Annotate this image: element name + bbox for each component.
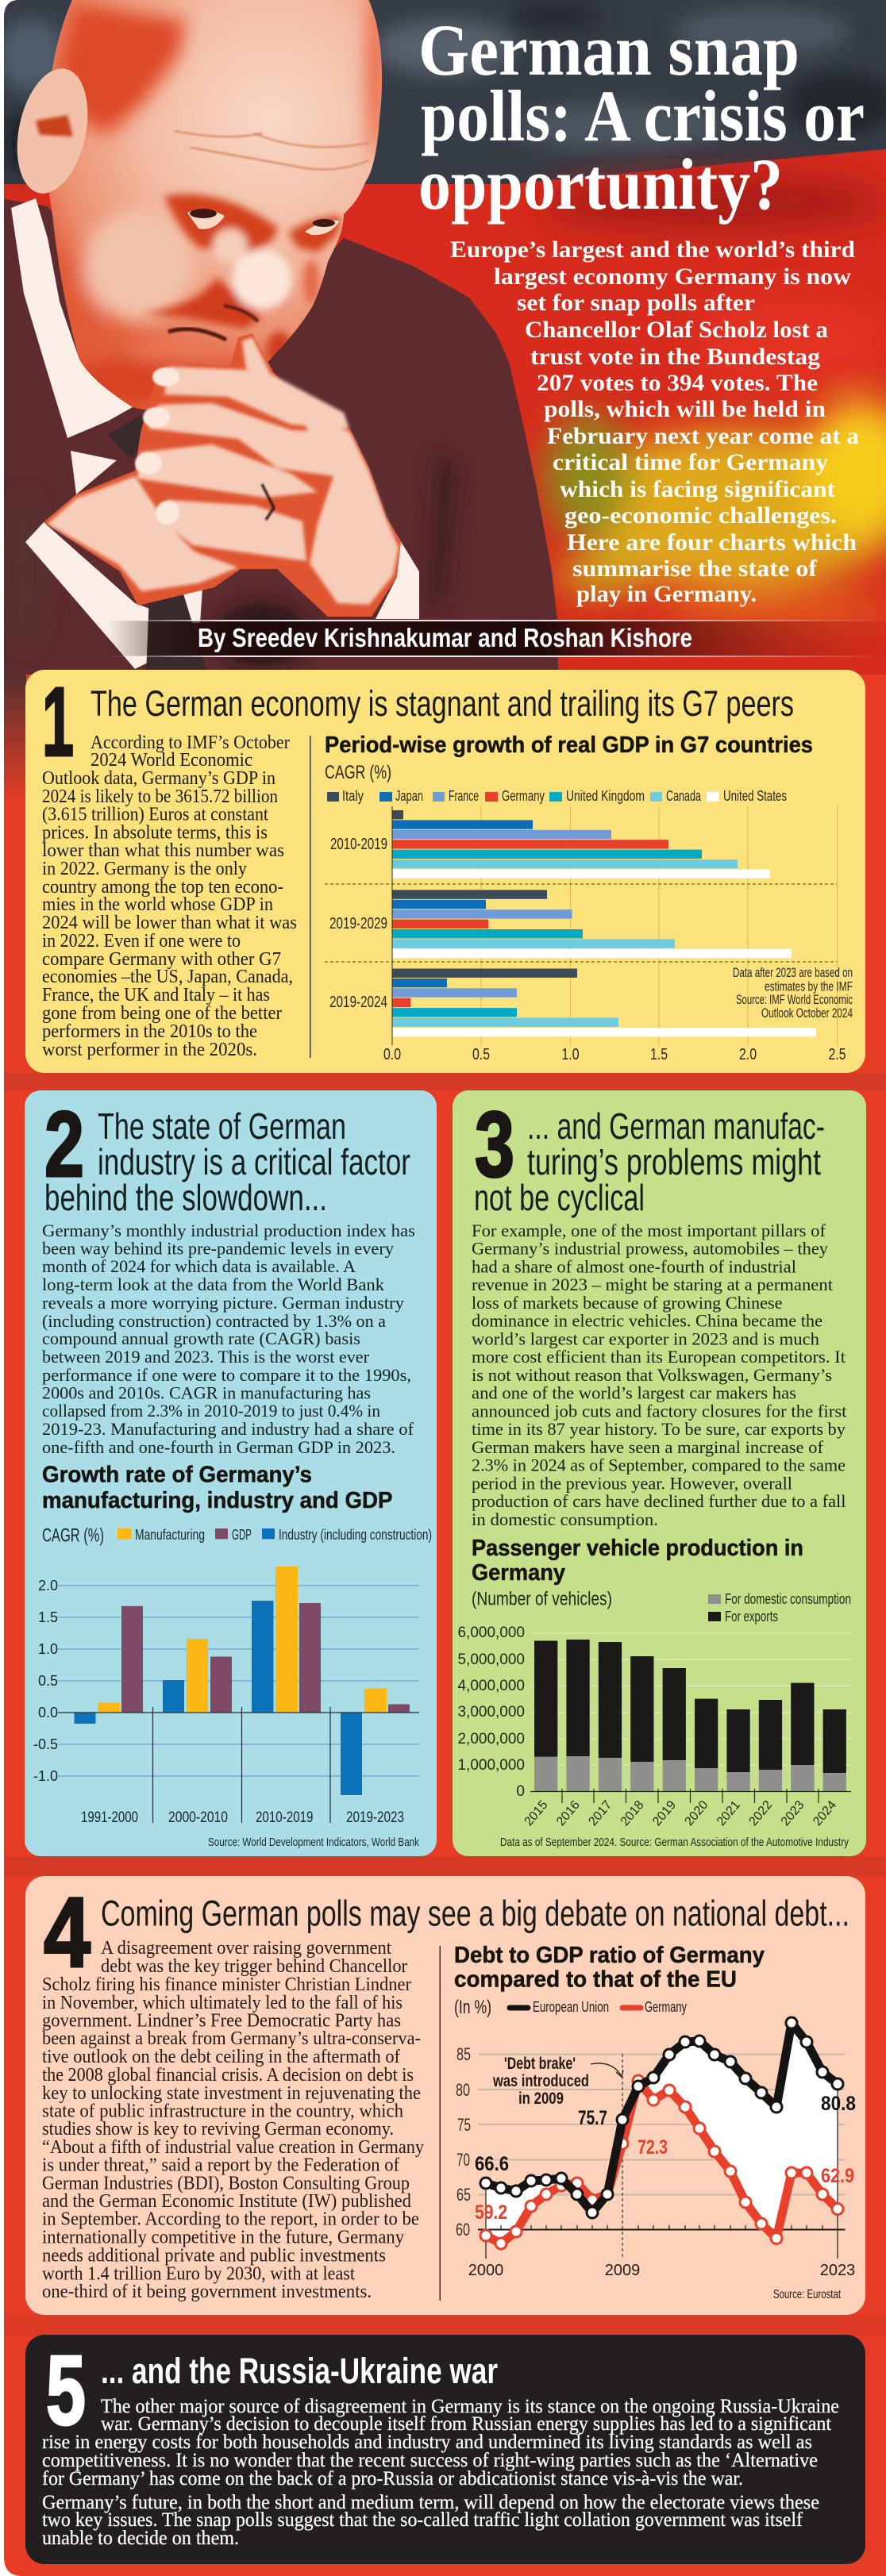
body text 4: needs additional private and public investments: [42, 2246, 386, 2266]
stacked bar chart: passenger vehicle production: [457, 1624, 851, 1828]
intro text: trust vote in the Bundestag: [530, 344, 820, 370]
suit: [0, 198, 558, 675]
intro text: geo-economic challenges.: [564, 502, 837, 529]
legend 1: [327, 788, 787, 804]
stacked bar chart: passenger vehicle production: 2018: [618, 1798, 647, 1828]
body text 1: (3.615 trillion) Euros at constant: [42, 805, 268, 825]
bar chart: manufacturing, industry and GDP growth: -1.0: [33, 1768, 58, 1784]
bar chart: manufacturing, industry and GDP growth: 0.0: [38, 1705, 58, 1721]
line chart: debt to GDP: 75.7: [578, 2107, 607, 2129]
heading 5: ... and the Russia-Ukraine war: [101, 2351, 498, 2391]
body text 3: period in the previous year. However, overall: [472, 1473, 792, 1494]
body text 3: more cost efficient than its European competitors. It: [472, 1347, 846, 1367]
body text 1: lower than what this number was: [42, 840, 284, 861]
body text 2: Germany’s monthly industrial production index has: [42, 1221, 415, 1240]
bar chart: G7 growth: 2.5: [829, 1046, 846, 1063]
stacked bar chart: passenger vehicle production: 2015: [522, 1798, 551, 1828]
chart title 4: compared to that of the EU: [454, 1967, 737, 1992]
legend 3: For exports: [725, 1609, 778, 1624]
body text 1: in 2022. Even if one were to: [42, 931, 241, 952]
number 3: 3: [475, 1092, 514, 1196]
stacked bar chart: passenger vehicle production: 2022: [746, 1798, 775, 1828]
chart title 1: Period-wise growth of real GDP in G7 countries: [325, 732, 813, 758]
bar chart: G7 growth: 0.5: [472, 1046, 490, 1063]
body text 3: 2.3% in 2024 as of September, compared to the same: [472, 1455, 846, 1475]
bar chart: manufacturing, industry and GDP growth: 2019-2023: [346, 1809, 404, 1826]
number 5: 5: [46, 2336, 86, 2446]
bar chart: G7 growth: 2010-2019: [330, 836, 387, 853]
stacked bar chart: passenger vehicle production: 4,000,000: [457, 1678, 525, 1694]
intro text: set for snap polls after: [517, 290, 755, 316]
body text 2: collapsed from 2.3% in 2010-2019 to just 0.4% in: [42, 1401, 380, 1421]
body text 4: is under threat,” said a report by the Federation of: [42, 2155, 399, 2176]
bar chart: manufacturing, industry and GDP growth: -0.5: [33, 1736, 58, 1752]
stacked bar chart: passenger vehicle production: 2023: [779, 1798, 807, 1828]
heading 2: [44, 1105, 410, 1218]
intro text: February next year come at a: [547, 423, 859, 449]
title: opportunity?: [418, 144, 783, 225]
panel 5: Russia-Ukraine war: [25, 2335, 865, 2564]
arrow: debt brake: [591, 2063, 623, 2077]
stacked bar chart: passenger vehicle production: 3,000,000: [457, 1704, 525, 1721]
axis unit 4: (In %): [454, 1997, 491, 2018]
bar chart: G7 growth: 2.0: [739, 1046, 757, 1063]
intro text: Chancellor Olaf Scholz lost a: [525, 317, 828, 343]
panel 2: state of industry: [25, 1090, 437, 1856]
byline band: [107, 621, 886, 656]
body text 1: [42, 732, 297, 1060]
body text 3: For example, one of the most important pillars of: [472, 1221, 826, 1240]
heading 2: industry is a critical factor: [98, 1141, 410, 1182]
body text 5: The other major source of disagreement in Germany is its stance on the ongoing Russia-Ukraine: [101, 2396, 839, 2417]
body text 2: long-term look at the data from the World Bank: [42, 1275, 384, 1294]
panel 1: stagnant economy: [25, 668, 865, 1073]
line chart: debt to GDP: 80: [456, 2080, 470, 2100]
legend 1: Canada: [666, 788, 702, 804]
body text 1: country among the top ten econo-: [42, 877, 283, 898]
body text 4: in November, which ultimately led to the fall of his: [42, 1993, 403, 2013]
body text 1: France, the UK and Italy – it has: [42, 985, 270, 1005]
legend 1: Germany: [502, 788, 545, 804]
body text 4: Scholz firing his finance minister Christian Lindner: [42, 1974, 411, 1995]
byline: By Sreedev Krishnakumar and Roshan Kishore: [198, 623, 692, 652]
chart title 2: Growth rate of Germany’s: [42, 1462, 312, 1487]
bar chart: G7 growth: 2019-2024: [329, 994, 387, 1011]
body text 4: debt was the key trigger behind Chancellor: [101, 1956, 407, 1977]
legend 1: United States: [723, 788, 787, 804]
body text 4: worth 1.4 trillion Euro by 2030, with at least: [42, 2263, 355, 2284]
body text 1: According to IMF’s October: [91, 732, 290, 753]
body text 4: “About a fifth of industrial value creation in Germany: [42, 2137, 424, 2158]
axis unit 1: CAGR (%): [325, 762, 391, 783]
line chart: debt to GDP: 59.2: [475, 2201, 507, 2224]
body text 4: in September. According to the report, in order to be: [42, 2209, 419, 2230]
stacked bar chart: passenger vehicle production: 2016: [554, 1798, 583, 1828]
hands: [44, 333, 401, 617]
body text 5: war. Germany’s decision to decouple itself from Russian energy supplies has led to a significant: [101, 2413, 831, 2435]
chart note: [733, 965, 853, 1021]
series: European Union: [480, 2017, 843, 2218]
body text 2: performance if one were to compare it to the 1990s,: [42, 1365, 411, 1385]
bar chart: manufacturing, industry and GDP growth: 2000-2010: [168, 1809, 228, 1826]
stacked bar chart: passenger vehicle production: 2021: [715, 1798, 743, 1828]
stacked bar chart: passenger vehicle production: 5,000,000: [457, 1651, 525, 1668]
stacked bar chart: passenger vehicle production: 0: [516, 1783, 525, 1800]
body text 3: revenue in 2023 – might be staring at a permanent: [472, 1275, 833, 1294]
body text 3: Germany’s industrial prowess, automobiles – they: [472, 1239, 828, 1259]
bar chart: manufacturing, industry and GDP growth: [33, 1567, 419, 1826]
stacked bar chart: passenger vehicle production: 1,000,000: [457, 1757, 525, 1774]
chart title 2: [42, 1462, 392, 1513]
legend 1: United Kingdom: [566, 788, 645, 804]
line chart: debt to GDP: 2023: [820, 2262, 855, 2279]
legend 2: GDP: [232, 1527, 252, 1543]
panel 3: manufacturing problems: [453, 1090, 866, 1856]
legend 1: Italy: [342, 788, 364, 804]
body text 2: 2000s and 2010s. CAGR in manufacturing has: [42, 1382, 371, 1403]
body text 5: Germany’s future, in both the short and medium term, will depend on how the electorate views these: [42, 2492, 819, 2513]
stacked bar chart: passenger vehicle production: 2020: [683, 1798, 711, 1828]
body text 2: between 2019 and 2023. This is the worst ever: [42, 1347, 370, 1367]
body text 3: is not without reason that Volkswagen, Germany’s: [472, 1365, 832, 1385]
source 4: Source: Eurostat: [773, 2288, 841, 2301]
bar chart: G7 growth: 2019-2029: [329, 915, 387, 932]
body text 4: A disagreement over raising government: [101, 1938, 391, 1959]
line chart: debt to GDP: 85: [456, 2044, 471, 2064]
intro text: Europe’s largest and the world’s third: [450, 236, 855, 263]
line chart: debt to GDP: 75: [457, 2115, 471, 2135]
legend 1: Japan: [395, 788, 423, 804]
bar chart: G7 growth: 1.5: [650, 1046, 668, 1063]
shirt collar and cuffs: [11, 198, 419, 669]
heading 3: not be cyclical: [474, 1177, 645, 1218]
head: [46, 0, 384, 410]
axis unit 2: CAGR (%): [42, 1525, 104, 1546]
intro text: Here are four charts which: [567, 529, 857, 556]
line chart: debt to GDP: 70: [456, 2150, 470, 2170]
body text 1: gone from being one of the better: [42, 1003, 282, 1024]
callout: debt brake: in 2009: [518, 2090, 564, 2108]
body text 3: [472, 1221, 846, 1529]
number 2: 2: [44, 1092, 84, 1196]
intro text: play in Germany.: [576, 581, 757, 607]
ear: [17, 68, 87, 194]
bar chart: manufacturing, industry and GDP growth: 1991-2000: [81, 1809, 138, 1826]
bar chart: manufacturing, industry and GDP growth: 2.0: [38, 1578, 58, 1594]
intro text: polls, which will be held in: [544, 396, 826, 422]
body text 3: and one of the world’s largest car makers has: [472, 1383, 796, 1403]
body text 2: [42, 1221, 415, 1457]
intro text: summarise the state of: [572, 556, 818, 582]
chart title 2: manufacturing, industry and GDP: [42, 1488, 392, 1513]
legend 2: Manufacturing: [135, 1527, 205, 1543]
body text 1: prices. In absolute terms, this is: [42, 822, 268, 843]
panel 4: national debt: [25, 1876, 865, 2315]
line chart: debt to GDP: [456, 2017, 856, 2279]
body text 4: internationally competitive in the future, Germany: [42, 2228, 404, 2248]
line chart: debt to GDP: 2000: [468, 2262, 503, 2279]
bar chart: manufacturing, industry and GDP growth: 2010-2019: [256, 1809, 313, 1826]
bar chart: manufacturing, industry and GDP growth: 1.5: [38, 1609, 58, 1625]
intro text: largest economy Germany is now: [494, 263, 851, 290]
number 4: 4: [44, 1878, 91, 1988]
body text 5: unable to decide on them.: [42, 2528, 239, 2549]
heading 2: The state of German: [98, 1105, 346, 1147]
body text 3: time in its 87 year history. To be sure, car exports by: [472, 1419, 846, 1439]
series: Germany: [480, 2075, 843, 2249]
body text 1: 2024 will be lower than what it was: [42, 913, 297, 933]
body text 1: 2024 World Economic: [91, 750, 252, 771]
body text 3: world’s largest car exporter in 2023 and is much: [472, 1328, 819, 1349]
legend 1: France: [449, 788, 479, 804]
bar chart: manufacturing, industry and GDP growth: 1.0: [38, 1641, 58, 1657]
legend 2: [117, 1527, 432, 1543]
body text 3: dominance in electric vehicles. China became the: [472, 1311, 822, 1331]
body text 4: state of public infrastructure in the country, which: [42, 2101, 403, 2122]
body text 1: compare Germany with other G7: [42, 949, 281, 970]
body text 4: one-third of it being government investments.: [42, 2282, 372, 2302]
chart title 4: Debt to GDP ratio of Germany: [454, 1943, 765, 1968]
intro text: [450, 236, 859, 607]
body text 3: German makers have seen a marginal increase of: [472, 1437, 824, 1457]
body text 4: the 2008 global financial crisis. A decision on debt is: [42, 2065, 414, 2086]
chart title 3: [472, 1536, 803, 1586]
body text 2: one-fifth and one-fourth in German GDP in 2023.: [42, 1437, 395, 1457]
body text 4: key to unlocking state investment in rejuvenating the: [42, 2083, 421, 2104]
body text 4: [42, 1938, 424, 2302]
body text 3: in domestic consumption.: [472, 1509, 658, 1529]
bar chart: manufacturing, industry and GDP growth: 0.5: [38, 1673, 58, 1689]
body text 2: reveals a more worrying picture. German industry: [42, 1293, 404, 1313]
body text 2: compound annual growth rate (CAGR) basis: [42, 1328, 360, 1348]
legend 4: [510, 1999, 687, 2015]
body text 2: month of 2024 for which data is available. A: [42, 1256, 356, 1276]
intro text: which is facing significant: [560, 476, 835, 502]
line chart: debt to GDP: 72.3: [638, 2136, 668, 2159]
body text 4: been against a break from Germany’s ultra-conserva-: [42, 2028, 421, 2049]
body text 4: and the German Economic Institute (IW) published: [42, 2191, 411, 2212]
title: [418, 10, 865, 225]
body text 1: mies in the world whose GDP in: [42, 894, 273, 915]
stacked bar chart: passenger vehicle production: 2,000,000: [457, 1731, 525, 1747]
bar chart: G7 growth: 1.0: [562, 1046, 580, 1063]
line chart: debt to GDP: 65: [456, 2185, 471, 2205]
body text 3: had a share of almost one-fourth of industrial: [472, 1257, 796, 1276]
chart title 4: [454, 1943, 765, 1992]
bar chart: G7 growth: [325, 806, 846, 1063]
body text 3: loss of markets because of growing Chinese: [472, 1293, 783, 1313]
body text 5: for Germany’ has come on the back of a pro-Russia or abdicationist stance vis-à-vis the war.: [42, 2468, 743, 2489]
body text 5: [42, 2396, 839, 2549]
callout: debt brake: [492, 2055, 589, 2108]
intro text: critical time for Germany: [553, 449, 828, 475]
legend 4: European Union: [533, 1999, 609, 2015]
bar chart: G7 growth: 0.0: [383, 1046, 401, 1063]
source 2: Source: World Development Indicators, World Bank: [208, 1836, 419, 1849]
body text 4: German Industries (BDI), Boston Consulting Group: [42, 2173, 410, 2193]
stacked bar chart: passenger vehicle production: 6,000,000: [457, 1624, 525, 1641]
axis unit 3: (Number of vehicles): [472, 1589, 612, 1609]
body text 1: worst performer in the 2020s.: [42, 1040, 257, 1060]
body text 3: production of cars have declined further due to a fall: [472, 1491, 846, 1511]
stacked bar chart: passenger vehicle production: 2024: [811, 1798, 839, 1828]
line chart: debt to GDP: 62.9: [821, 2165, 854, 2187]
title: German snap: [418, 10, 799, 90]
body text 1: Outlook data, Germany’s GDP in: [42, 768, 275, 789]
line chart: debt to GDP: 66.6: [475, 2153, 509, 2175]
body text 1: in 2022. Germany is the only: [42, 859, 247, 879]
line chart: debt to GDP: 80.8: [821, 2093, 856, 2115]
body text 2: 2019-23. Manufacturing and industry had a share of: [42, 1419, 414, 1439]
stacked bar chart: passenger vehicle production: 2019: [650, 1798, 679, 1828]
number 1: 1: [42, 668, 74, 777]
body text 4: studies show is key to reviving German economy.: [42, 2119, 394, 2140]
legend 2: Industry (including construction): [279, 1527, 432, 1543]
body text 4: tive outlook on the debt ceiling in the aftermath of: [42, 2047, 400, 2067]
body text 2: been way behind its pre-pandemic levels in every: [42, 1239, 394, 1259]
body text 1: economies –the US, Japan, Canada,: [42, 967, 293, 987]
tie: [107, 413, 208, 675]
intro text: 207 votes to 394 votes. The: [537, 370, 818, 396]
line chart: debt to GDP: 60: [456, 2220, 470, 2240]
body text 5: competitiveness. It is no wonder that the recent success of right-wing parties such as the ‘Alternative: [42, 2450, 818, 2471]
body text 1: 2024 is likely to be 3615.72 billion: [42, 786, 278, 807]
hero: portrait and flag background: [0, 0, 886, 675]
line chart: debt to GDP: 2009: [605, 2262, 640, 2279]
stacked bar chart: passenger vehicle production: 2017: [586, 1798, 614, 1828]
legend 4: Germany: [645, 1999, 687, 2015]
callout: debt brake: 'Debt brake': [504, 2055, 576, 2073]
legend 3: [708, 1591, 851, 1624]
body text 5: rise in energy costs for both households and industry and undermined its living standards as well as: [42, 2432, 812, 2453]
body text 4: government. Lindner’s Free Democratic Party has: [42, 2011, 401, 2032]
heading 2: behind the slowdown...: [44, 1177, 327, 1218]
heading 3: [474, 1105, 825, 1218]
chart title 3: Germany: [472, 1560, 565, 1586]
body text 5: two key issues. The snap polls suggest that the so-called traffic light collation government was itself: [42, 2509, 803, 2531]
chart title 3: Passenger vehicle production in: [472, 1536, 803, 1561]
callout: debt brake: was introduced: [492, 2072, 589, 2090]
body text 2: (including construction) contracted by 1.3% on a: [42, 1311, 386, 1331]
body text 3: announced job cuts and factory closures for the first: [472, 1401, 846, 1421]
body text 1: performers in the 2010s to the: [42, 1021, 257, 1042]
